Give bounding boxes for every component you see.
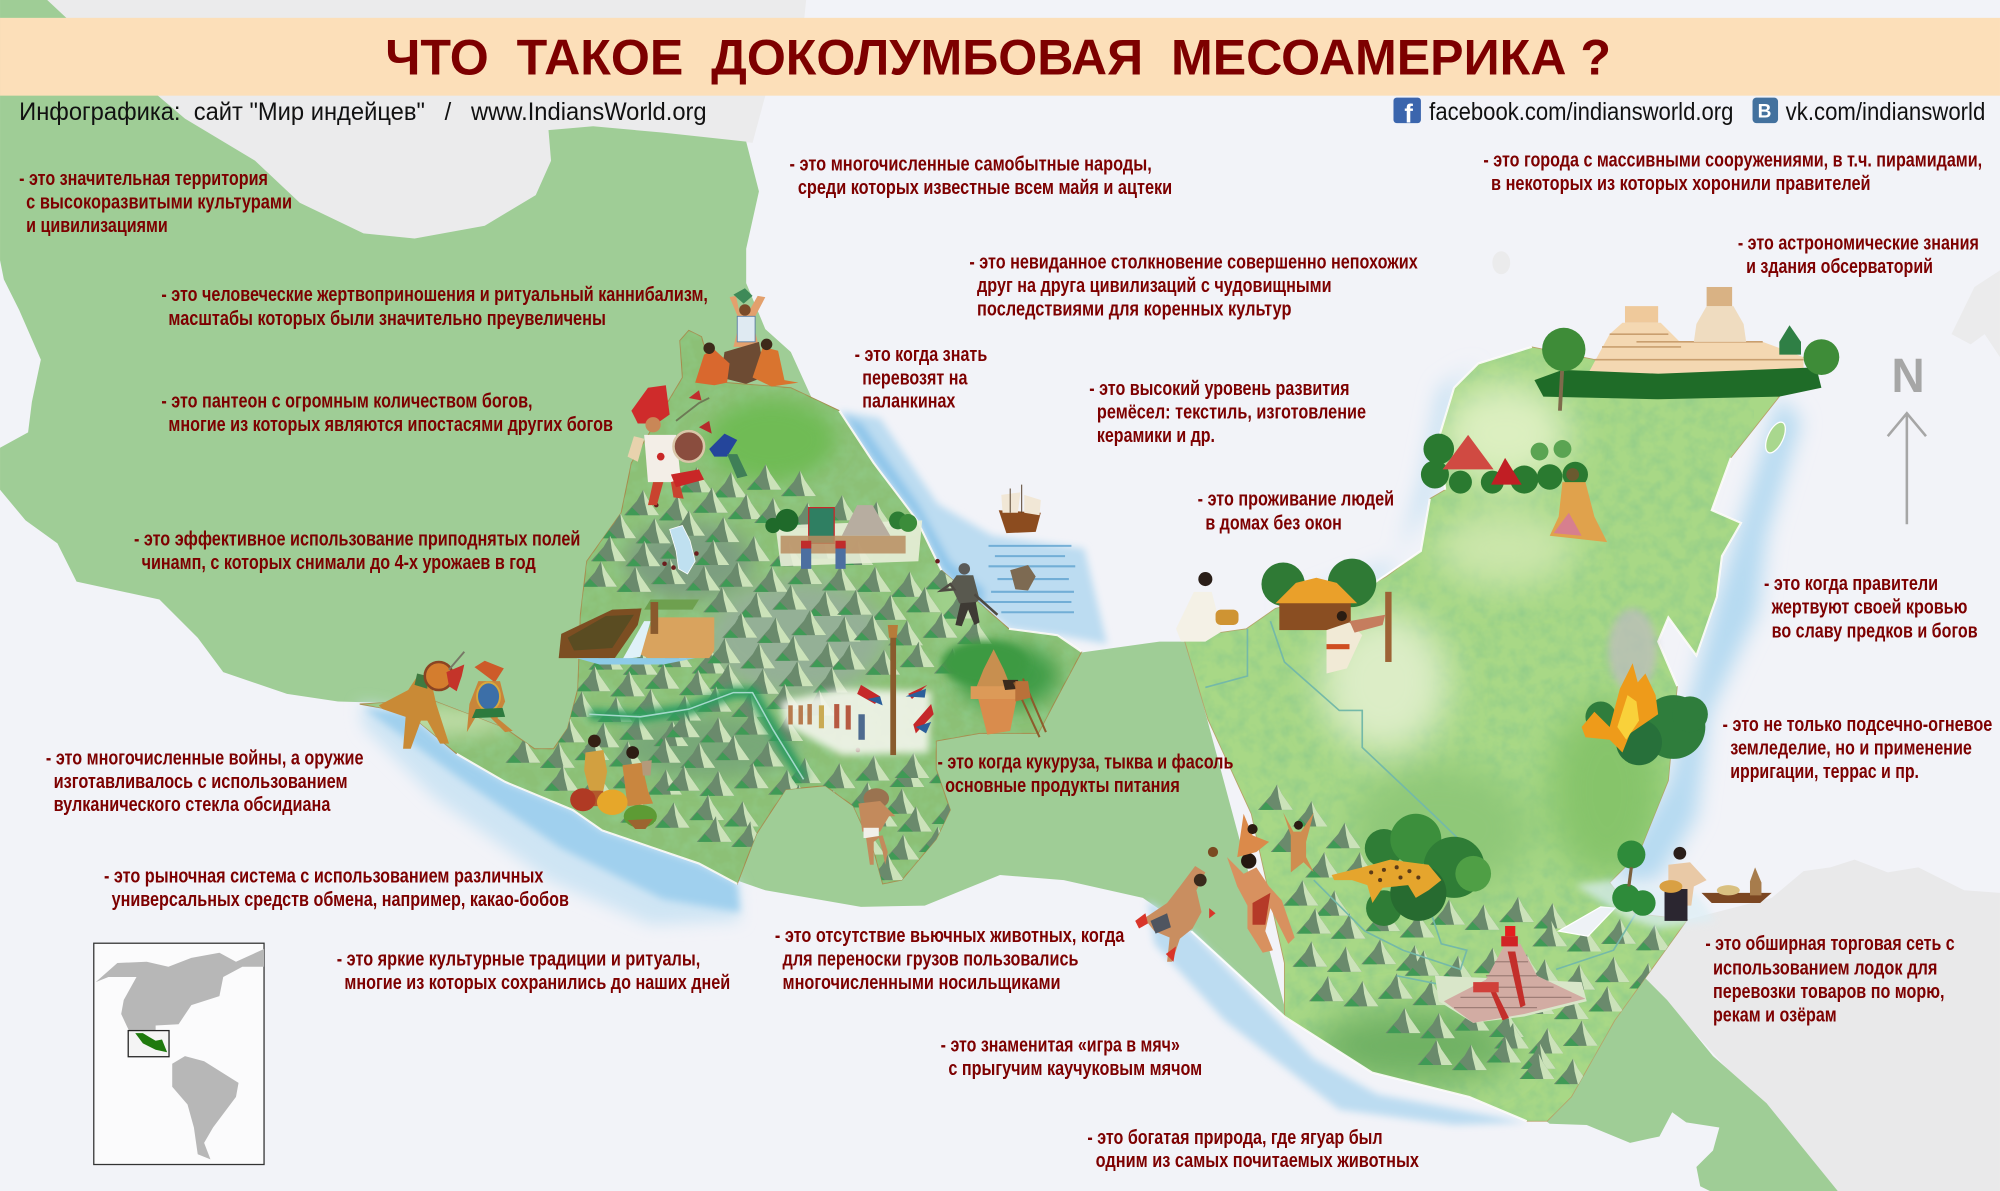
icon: facebook: f [1404,100,1413,128]
text: market: универсальных средств обмена, например, какао-бобов [112,889,569,911]
inset locator map [94,943,264,1165]
title: ЧТО ТАКОЕ ДОКОЛУМБОВАЯ МЕСОАМЕРИКА ? [385,30,1611,86]
text: territory: - это значительная территория [19,168,268,190]
icon: market women with baskets [570,735,657,829]
mountains of Central America [1258,784,1671,1084]
green river valley [589,693,804,779]
icon: slash-and-burn fire [1582,608,1708,765]
text: porters: - это отсутствие вьючных животных, когда [775,925,1125,947]
neighbouring land: south-east grey area [1644,860,2000,1191]
text: foods [938,751,1233,797]
icon: red pyramids in jungle [1421,434,1588,494]
text: pantheon [161,391,613,436]
icon: warriors fighting [379,652,513,749]
text: palanquins [855,344,987,413]
text: trade: рекам и озёрам [1713,1005,1837,1027]
icon: trader and canoe [1575,841,1772,929]
text: chinampas: чинамп, с которых снимали до 4-х урожаев в год [142,552,536,574]
text: market: - это рыночная система с использованием различных [104,866,544,888]
text: porters [775,925,1125,994]
dark green forest patch [941,640,1028,686]
text: wars: изготавливалось с использованием [54,771,348,793]
text: wars [46,748,364,816]
icon: Maya noblewoman [1550,468,1607,542]
text: palanquins: перевозят на [862,368,968,390]
grey blobs at the right edge [1492,251,2000,357]
title band [0,18,2000,96]
text: nature: одним из самых почитаемых животных [1096,1150,1420,1172]
text: chinampas [134,528,580,574]
credit line: Инфографика: сайт "Мир индейцев" / www.IndiansWorld.org [19,98,707,126]
icon: jaguar in jungle [1332,814,1491,926]
icon: temple and crowd [765,505,922,569]
icon: Maya hut with villagers [1176,559,1392,673]
text: clash of civilizations [969,251,1418,321]
text: market [104,866,569,911]
icon: vk [1753,98,1778,123]
towns: dark dots [654,503,940,752]
rivers [1205,621,1639,985]
text: houses [1198,489,1394,534]
text: ball game: - это знаменитая «игра в мяч» [941,1035,1180,1057]
text: rulers' blood [1764,573,1978,643]
icon: Spanish ship [999,485,1041,533]
text: crafts: ремёсел: текстиль, изготовление [1097,401,1366,423]
text: chinampas: - это эффективное использование приподнятых полей [134,528,580,550]
icon: porter [858,788,895,865]
text: clash of civilizations: - это невиданное столкновение совершенно непохожих [969,251,1418,273]
icon: Aztec warrior priest with bird [628,385,747,505]
icon: ball game players [1135,812,1314,962]
text: crafts: керамики и др. [1097,425,1215,447]
text: crafts [1089,378,1366,447]
text: clash of civilizations: друг на друга цивилизаций с чудовищными [977,275,1332,297]
text: peoples: среди которых известные всем майя и ацтеки [798,177,1172,199]
text: territory: и цивилизациями [26,215,168,237]
text: peoples [790,153,1172,199]
text: pantheon: - это пантеон с огромным количеством богов, [161,391,533,413]
icon: stepped pyramid with red temple [1435,926,1587,1023]
text: cities: в некоторых из которых хоронили правителей [1491,173,1871,195]
text: peoples: - это многочисленные самобытные народы, [790,153,1152,175]
text: foods: - это когда кукуруза, тыква и фасоль [938,751,1233,773]
text: clash of civilizations: последствиями для коренных культур [977,299,1291,321]
icon: voladores ritual [781,625,934,755]
text: wars: - это многочисленные войны, а оружие [46,748,364,770]
icon: lake [670,525,695,574]
text: traditions: многие из которых сохранились до наших дней [344,972,730,994]
text: porters: многочисленными носильщиками [783,972,1061,994]
sea wash: Pacific coast of Mexico [360,704,740,925]
text: nature: - это богатая природа, где ягуар был [1087,1127,1383,1149]
sea wash: Caribbean and Yucatan coasts [1276,364,1801,883]
illustrated map: Yucatan and Central America [1180,344,1779,1135]
text: cities [1483,149,1982,195]
sea wash: gulf of Mexico [839,411,1107,644]
icon: vk: В [1758,101,1771,122]
north arrow: N [1892,349,1925,403]
text: agriculture [1723,714,1992,783]
lagoon [1559,907,1615,936]
facebook link: facebook.com/indiansworld.org [1429,98,1733,126]
text: astronomy [1738,232,1979,278]
text: trade: перевозки товаров по морю, [1713,981,1944,1003]
text: rulers' blood: - это когда правители [1764,573,1938,595]
text: ball game: с прыгучим каучуковым мячом [948,1058,1202,1080]
text: sacrifices: - это человеческие жертвоприношения и ритуальный каннибализм, [161,284,708,306]
text: palanquins: паланкинах [862,391,956,413]
text: sacrifices [161,284,708,330]
neighbouring land: north grey area [47,0,806,239]
text: pantheon: многие из которых являются ипостасями других богов [168,414,613,436]
icon: small boat [1010,565,1036,591]
mountains [505,464,1033,885]
icon: sacrifice scene [695,288,798,386]
icon: conquistador [941,563,997,626]
text: agriculture: ирригации, террас и пр. [1730,761,1919,783]
text: territory: с высокоразвитыми культурами [26,192,292,214]
island [1762,419,1789,456]
text: sacrifices: масштабы которых были значительно преувеличены [168,308,606,330]
text: porters: для переноски грузов пользовались [783,949,1078,971]
text: wars: вулканического стекла обсидиана [54,794,331,816]
text: foods: основные продукты питания [945,775,1180,797]
icon: chinampa fields [559,599,714,665]
icon: sea waves [982,546,1075,612]
text: trade [1705,933,1955,1027]
text: nature [1087,1127,1420,1172]
icon: facebook [1393,98,1421,128]
text: traditions [337,949,730,994]
icon: granary with ladder [971,649,1046,737]
coastlines [457,347,1741,1121]
text: traditions: - это яркие культурные традиции и ритуалы, [337,949,700,971]
text: crafts: - это высокий уровень развития [1089,378,1349,400]
text: houses: - это проживание людей [1198,489,1394,511]
text: ball game [941,1035,1202,1080]
text: palanquins: - это когда знать [855,344,987,366]
text: houses: в домах без окон [1205,512,1342,534]
text: astronomy: и здания обсерваторий [1746,256,1933,278]
north arrow [1888,349,1926,524]
icon: observatory and pyramid [1534,287,1839,411]
sea wash: Pacific coast of Central America [1148,900,1527,1125]
text: territory [19,168,292,237]
illustrated map: central Mexico [357,319,1097,893]
text: trade: использованием лодок для [1713,957,1937,979]
